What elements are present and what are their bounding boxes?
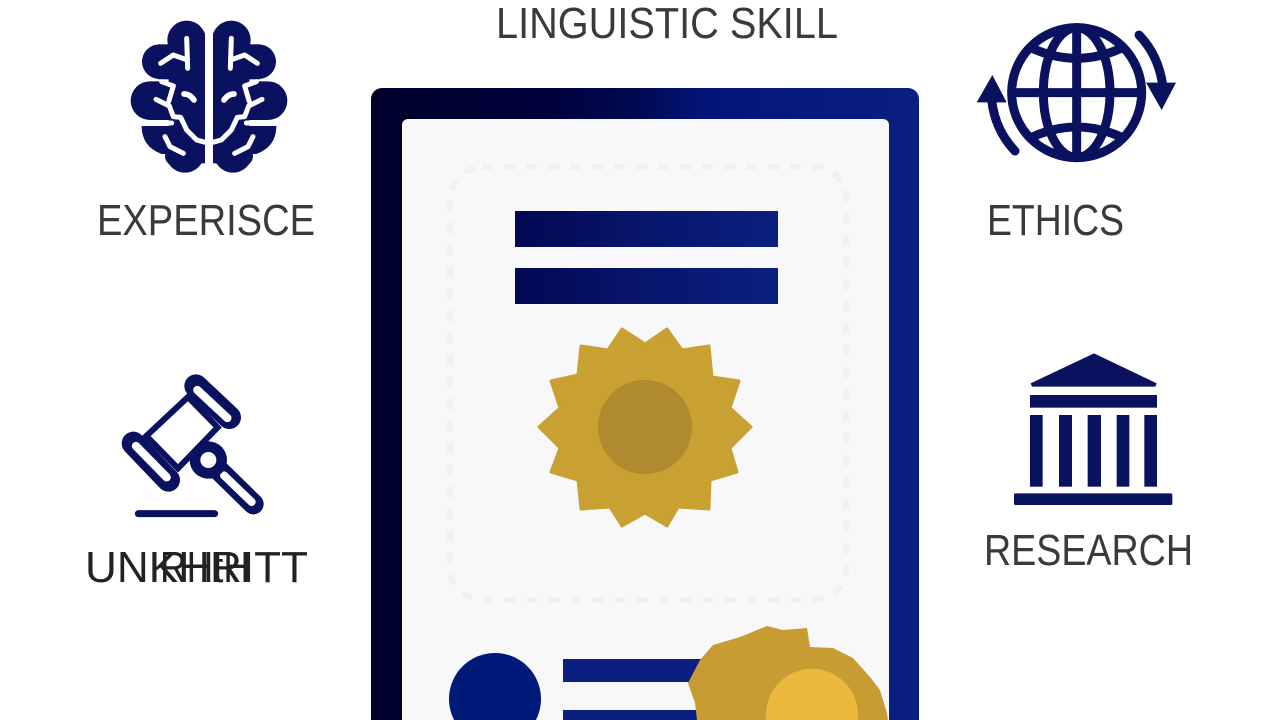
heading bars bbox=[515, 211, 778, 304]
label: ethics: ETHICS bbox=[987, 196, 1124, 245]
icon: brain bbox=[131, 21, 287, 173]
dotted inner border bbox=[450, 167, 846, 600]
panel: certificate bbox=[371, 88, 919, 720]
label: experisce: EXPERISCE bbox=[97, 196, 315, 245]
certificate page bbox=[402, 119, 889, 720]
label: unkhritt: UNKHRITT bbox=[85, 543, 308, 592]
icon: gold stamp bbox=[688, 626, 888, 720]
icon: globe with arrows bbox=[977, 28, 1176, 158]
certificate frame bbox=[371, 88, 919, 720]
icon: temple bbox=[1014, 353, 1172, 505]
signature dot bbox=[449, 653, 541, 720]
icon: gold seal bbox=[539, 329, 751, 526]
title: LINGUISTIC SKILL bbox=[496, 0, 838, 48]
label: unkhritt: RHtH bbox=[160, 543, 250, 592]
signature lines bbox=[563, 659, 708, 720]
label: research: RESEARCH bbox=[984, 526, 1193, 575]
icon: gavel bbox=[133, 386, 253, 514]
